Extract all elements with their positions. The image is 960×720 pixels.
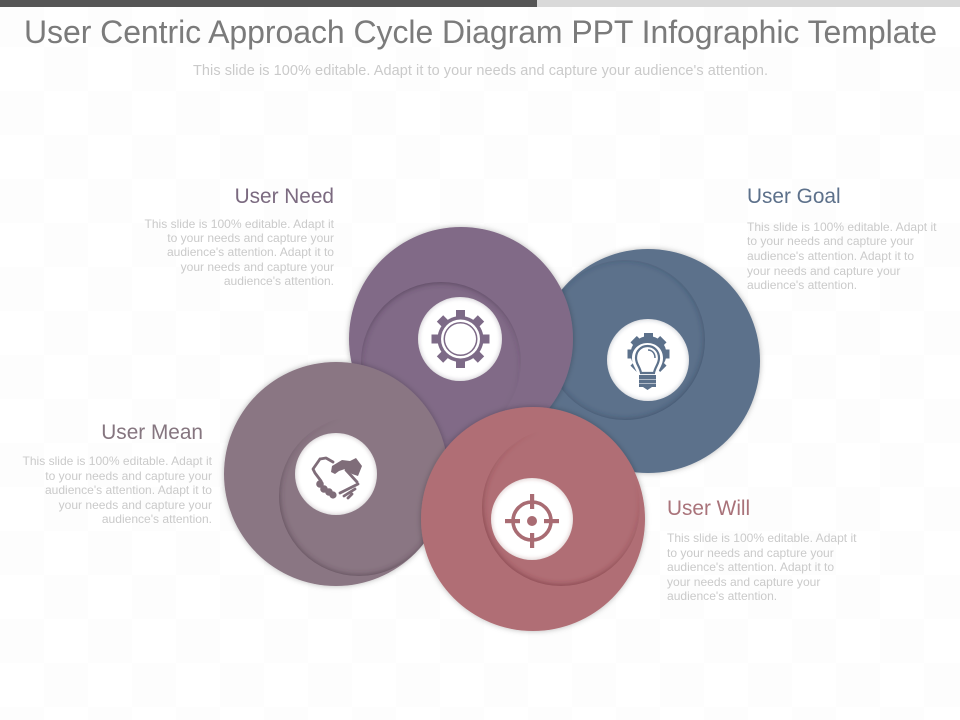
text block: user mean: your needs and capture your bbox=[59, 498, 212, 512]
white hub: will bbox=[489, 476, 575, 562]
panel: user goal disc bbox=[536, 249, 760, 473]
top progress bar bbox=[0, 0, 960, 7]
white hub: mean bbox=[293, 431, 379, 517]
text block: user mean: audience's attention. Adapt it to bbox=[45, 483, 212, 497]
text block: user mean: to your needs and capture your bbox=[45, 469, 212, 483]
text block: user mean: User Mean bbox=[101, 421, 203, 444]
text block: user will: audience's attention. Adapt it to bbox=[667, 560, 834, 574]
icon: gear bbox=[432, 310, 490, 368]
text block: user will: to your needs and capture your bbox=[667, 546, 834, 560]
text block: user mean: audience's attention. bbox=[102, 512, 212, 526]
text block: user need: your needs and capture your bbox=[181, 260, 334, 274]
white hub: goal bbox=[605, 317, 691, 403]
panel: user need disc bbox=[349, 227, 573, 451]
text block: user will: This slide is 100% editable. Adapt it bbox=[667, 531, 857, 545]
title: User Centric Approach Cycle Diagram PPT Infographic Template bbox=[24, 14, 937, 50]
text block: user will: audience's attention. bbox=[667, 589, 777, 603]
icon: light bulb with gear bbox=[628, 333, 670, 390]
text block: user need bbox=[144, 185, 335, 288]
text block: user need: to your needs and capture your bbox=[167, 231, 334, 245]
subtitle: This slide is 100% editable. Adapt it to your needs and capture your audience's attention. bbox=[193, 63, 768, 79]
text block: user goal: User Goal bbox=[747, 185, 841, 208]
text block: user goal: your needs and capture your bbox=[747, 264, 900, 278]
text block: user goal bbox=[747, 185, 937, 292]
text block: user goal: This slide is 100% editable. Adapt it bbox=[747, 220, 937, 234]
text block: user mean: This slide is 100% editable. Adapt it bbox=[22, 454, 213, 468]
text block: user goal: audience's attention. Adapt it to bbox=[747, 249, 914, 263]
text block: user need: audience's attention. Adapt it to bbox=[167, 245, 334, 259]
text block: user goal: to your needs and capture your bbox=[747, 234, 914, 248]
text block: user need: audience's attention. bbox=[224, 274, 334, 288]
text block: user need: This slide is 100% editable. Adapt it bbox=[144, 217, 335, 231]
text block: user mean bbox=[22, 421, 213, 526]
text block: user will bbox=[667, 497, 857, 603]
text block: user goal: audience's attention. bbox=[747, 278, 857, 292]
text block: user need: User Need bbox=[235, 185, 334, 208]
panel: user mean disc bbox=[224, 362, 448, 586]
icon: target bbox=[505, 494, 559, 548]
text block: user will: your needs and capture your bbox=[667, 575, 820, 589]
white hub: need bbox=[416, 295, 504, 383]
text block: user will: User Will bbox=[667, 497, 750, 520]
panel: user will disc bbox=[421, 407, 645, 631]
icon: handshake bbox=[313, 458, 362, 499]
